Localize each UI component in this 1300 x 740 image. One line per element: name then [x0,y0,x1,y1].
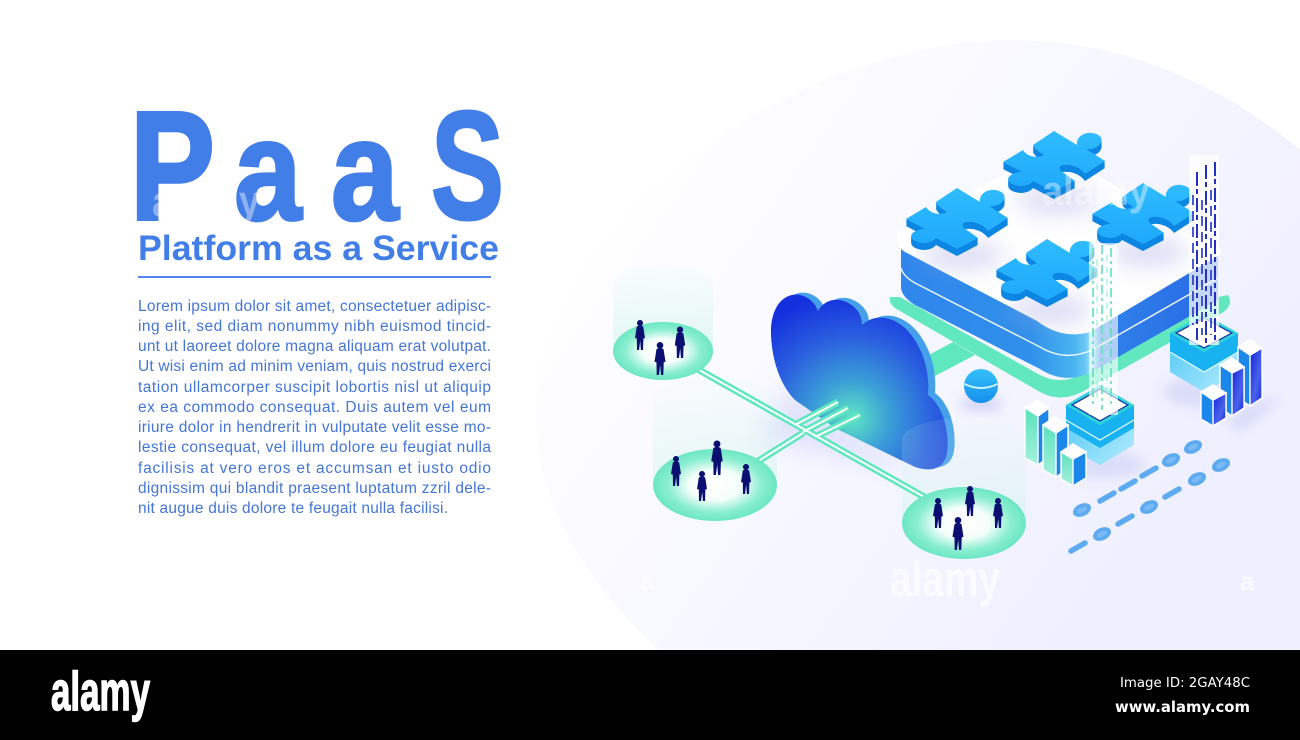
title: PaaS: a [234,91,303,251]
cloud [760,293,955,470]
bar chart: left [1025,400,1086,486]
puzzle piece: right [1092,183,1194,251]
title: PaaS: S [431,80,504,252]
connector lines [685,362,933,502]
body text block: lestie consequat, vel illum dolore eu feugiat nulla [138,439,491,456]
data tower: navy stream [1189,155,1219,345]
body text block: ing elit, sed diam nonummy nibh euismod tincid- [138,318,491,335]
body text block: Lorem ipsum dolor sit amet, consectetuer adipisc- [138,298,491,315]
server block: right [1163,314,1247,408]
body text block: dignissim qui blandit praesent luptatum zzril dele- [138,480,491,497]
watermarks [152,167,1255,607]
title: PaaS [130,79,504,252]
body text block [138,298,491,517]
body text block: ex ea commodo consequat. Duis autem vel eum [138,399,491,416]
platform block [897,153,1221,378]
bar chart: right [1201,340,1282,432]
subtitle: Platform as a Service [138,229,499,268]
watermarks: alamy [890,551,1000,607]
watermarks: a [640,566,655,596]
body text block: iriure dolor in hendrerit in vulputate velit esse mo- [138,419,491,436]
watermarks: alamy [1042,167,1151,214]
glass cylinder: group 2 [653,378,777,521]
sphere [959,369,1003,411]
body text block: Ut wisi enim ad minim veniam, quis nostrud exerci [138,358,491,375]
body text block: nit augue duis dolore te feugait nulla facilisi. [138,500,448,517]
puzzle piece: centre [996,239,1098,307]
title: PaaS: P [130,79,215,252]
image id: Image ID: 2GAY48C [1120,676,1250,691]
glass cylinder: group 1 [613,265,713,380]
title rule [138,276,491,278]
body text block: facilisis at vero eros et accumsan et iusto odio [138,460,491,477]
binary data rows [1071,437,1232,551]
body text block: unt ut laoreet dolore magna aliquam erat volutpat. [138,338,491,355]
body text block: tation ullamcorper suscipit lobortis nisl ut aliquip [138,379,491,396]
server block: centre [1061,385,1145,479]
user group disc 3 [902,486,1026,559]
data tower: green stream [1089,243,1118,415]
platform mint base [890,295,1230,398]
user group disc 2 [653,440,777,521]
watermarks: alamy [152,177,260,226]
footer bar [0,650,1300,740]
footer logo: alamy [51,660,150,722]
puzzle shadows [920,187,1188,323]
puzzle piece: left [906,188,1008,256]
background curved panel [536,40,1300,650]
puzzle piece: top [1003,131,1105,199]
watermarks: a [1240,566,1255,596]
title: PaaS: a [331,91,400,251]
website: www.alamy.com [1115,698,1250,716]
user group disc 1 [613,320,713,380]
glass cylinder: group 3 [902,418,1026,559]
